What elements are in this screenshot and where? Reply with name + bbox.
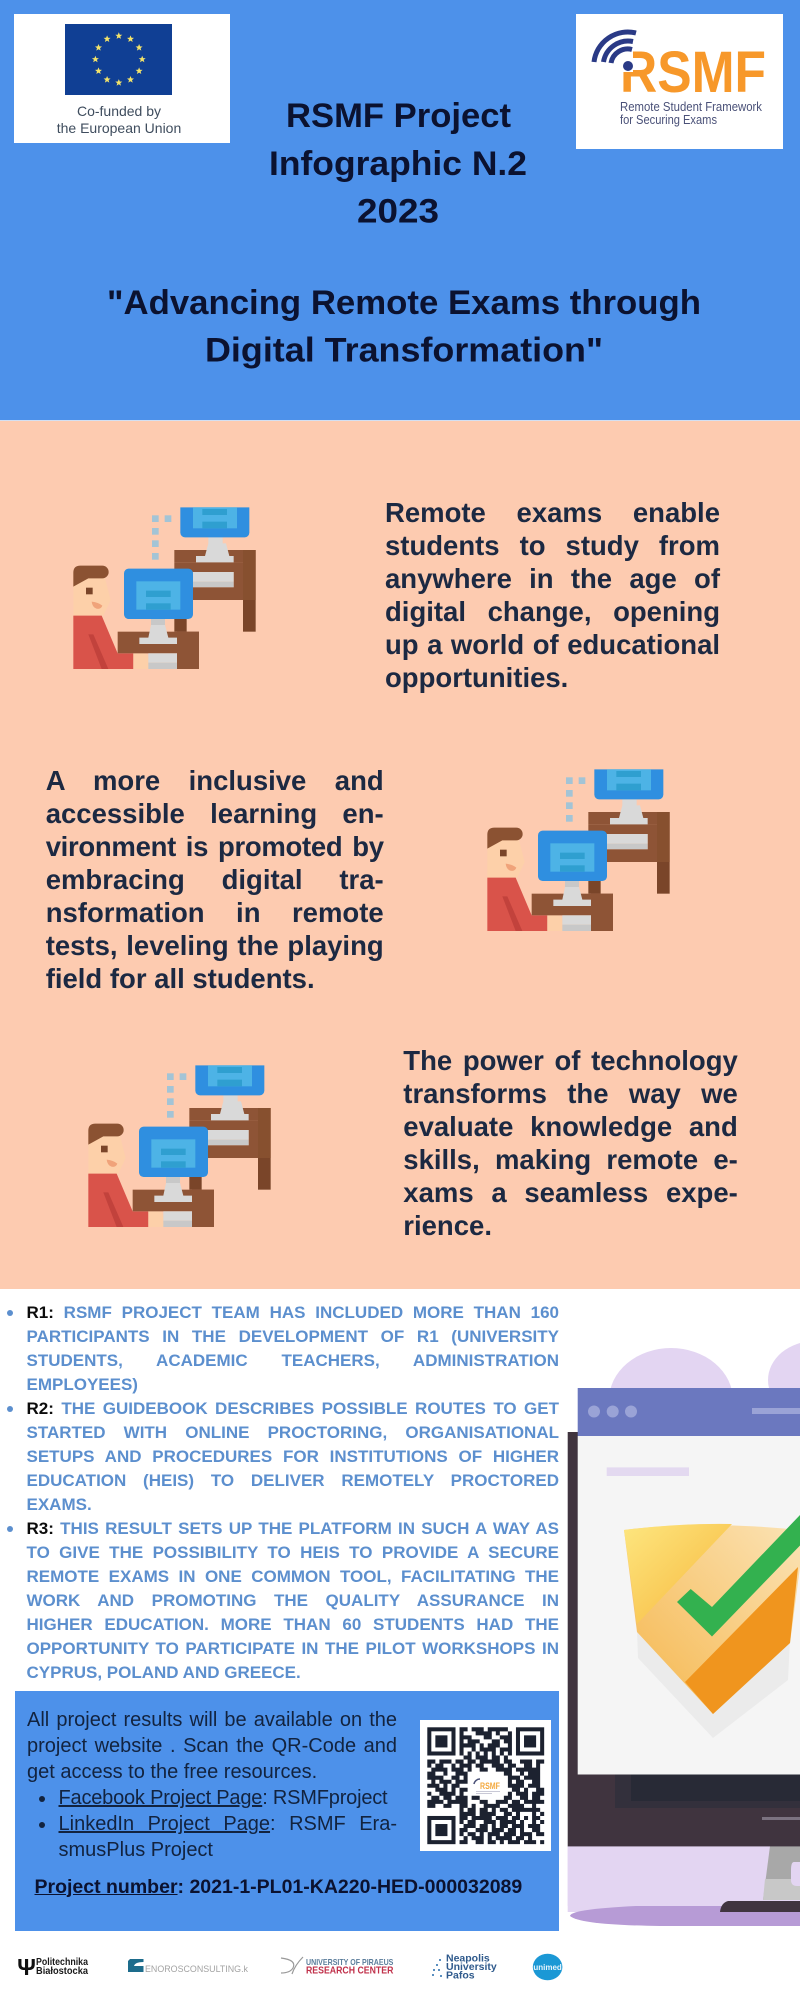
logo: Neapolis University Pafos: Pafos xyxy=(446,1969,475,1981)
results list: WORK AND PROMOTING THE QUALITY ASSURANCE IN xyxy=(26,1591,559,1610)
text block: project website and links: project website . Scan the QR-Code and xyxy=(27,1735,397,1757)
panel: digital transformation benefits xyxy=(0,421,800,1289)
title: 2023 xyxy=(357,192,439,230)
results list: EXAMS. xyxy=(26,1495,92,1514)
results list xyxy=(26,1303,559,1682)
logo: University of Piraeus Research Center: RESEARCH CENTER xyxy=(306,1964,394,1976)
text block: remote exams enable: anywhere in the age of xyxy=(385,563,720,594)
panel: header xyxy=(0,0,800,421)
text block: inclusive learning: A more inclusive and xyxy=(46,765,384,796)
results list: HIGHER EDUCATION. MORE THAN 60 STUDENTS HAD THE xyxy=(26,1615,559,1634)
illustration: secure exam monitor xyxy=(568,1343,800,1926)
text block: project website and links: LinkedIn Project Page: RSMF Era- xyxy=(58,1813,397,1835)
logo: Politechnika Bialostocka: Białostocka xyxy=(36,1966,88,1977)
logo: University of Piraeus Research Center xyxy=(281,1957,394,1976)
text block: power of technology xyxy=(403,1045,738,1241)
logo: Politechnika Bialostocka xyxy=(17,1954,88,1980)
results list: R2: THE GUIDEBOOK DESCRIBES POSSIBLE ROUTES TO GET xyxy=(26,1399,559,1418)
logo: Unimed xyxy=(533,1954,562,1980)
text block: remote exams enable: Remote exams enable xyxy=(385,497,720,528)
QR code: RSMF xyxy=(480,1781,500,1791)
text block: project website and links: All project results will be available on the xyxy=(27,1709,397,1731)
text block: project website and links: smusPlus Project xyxy=(58,1839,213,1861)
logo: University of Piraeus Research Center: UNIVERSITY OF PIRAEUS xyxy=(306,1957,394,1967)
text block: remote exams enable xyxy=(385,497,720,693)
text block: power of technology: rience. xyxy=(403,1210,492,1241)
bullet: R1 xyxy=(7,1310,13,1316)
results list: OPPORTUNITY TO PARTICIPATE IN THE PILOT WORKSHOPS IN xyxy=(26,1639,559,1658)
logo: Neapolis University Pafos: University xyxy=(446,1961,497,1973)
bullet: R3 xyxy=(7,1526,13,1532)
text block: remote exams enable: digital change, opening xyxy=(385,596,720,627)
results list: STUDENTS, ACADEMIC TEACHERS, ADMINISTRATION xyxy=(26,1351,559,1370)
text block: inclusive learning xyxy=(46,765,384,994)
logo: RSMF: Remote Student Framework xyxy=(620,99,762,114)
logo: EU co-funded: Co-funded by xyxy=(77,103,161,119)
results list: SETUPS AND PROCEDURES FOR INSTITUTIONS OF HIGHER xyxy=(26,1447,559,1466)
icon: student at computer 2 xyxy=(487,769,670,931)
logo: RSMF: RSMF xyxy=(620,40,766,105)
project number: Project number: 2021-1-PL01-KA220-HED-000032089 xyxy=(34,1876,522,1898)
bullet: Facebook xyxy=(39,1796,45,1802)
icon: student at computer 3 xyxy=(88,1065,271,1227)
bullet: LinkedIn xyxy=(39,1822,45,1828)
text block: remote exams enable: up a world of educational xyxy=(385,629,720,660)
icon: student at computer 1 xyxy=(73,507,256,669)
QR code xyxy=(420,1720,551,1851)
text block: power of technology: xams a seamless expe- xyxy=(403,1177,738,1208)
text block: remote exams enable: opportunities. xyxy=(385,662,568,693)
panel: project links box xyxy=(15,1691,559,1931)
results list: EMPLOYEES) xyxy=(26,1375,138,1394)
results list: R3: THIS RESULT SETS UP THE PLATFORM IN SUCH A WAY AS xyxy=(26,1519,559,1538)
text block: project website and links: get access to the free resources. xyxy=(27,1761,317,1783)
text block: inclusive learning: field for all students. xyxy=(46,963,315,994)
text block: inclusive learning: tests, leveling the playing xyxy=(46,930,384,961)
text block: remote exams enable: students to study from xyxy=(385,530,720,561)
text block: project website and links xyxy=(27,1709,397,1861)
title: "Advancing Remote Exams through xyxy=(107,284,701,322)
logo: Politechnika Bialostocka: Ψ xyxy=(17,1954,36,1980)
logo: Neapolis University Pafos xyxy=(432,1953,497,1981)
text block: power of technology: The power of technology xyxy=(403,1045,738,1076)
logo: EU co-funded: the European Union xyxy=(57,120,181,136)
text block: project website and links: Facebook Project Page: RSMFproject xyxy=(58,1787,387,1809)
logo: Neapolis University Pafos: Neapolis xyxy=(446,1953,490,1965)
text block: power of technology: transforms the way we xyxy=(403,1078,738,1109)
title: RSMF Project xyxy=(286,97,511,135)
title: Infographic N.2 xyxy=(269,145,527,183)
logo: RSMF xyxy=(576,14,783,149)
title: Digital Transformation" xyxy=(205,332,603,370)
logo: Politechnika Bialostocka: Politechnika xyxy=(36,1957,88,1968)
partner logos xyxy=(17,1953,562,1981)
results list: EDUCATION (HEIS) TO DELIVER REMOTELY PROCTORED xyxy=(26,1471,559,1490)
results list: TO GIVE THE POSSIBILITY TO HEIS TO PROVIDE A SECURE xyxy=(26,1543,559,1562)
results list: CYPRUS, POLAND AND GREECE. xyxy=(26,1663,301,1682)
text block: inclusive learning: vironment is promoted by xyxy=(46,831,384,862)
text block: inclusive learning: nsformation in remote xyxy=(46,897,384,928)
logo: EU co-funded xyxy=(14,14,230,143)
panel: results and contacts xyxy=(0,1289,800,2000)
logo: Enoros Consulting: ENOROSCONSULTING.k xyxy=(145,1964,248,1974)
logo: Unimed: unimed xyxy=(533,1963,562,1972)
results list: STARTED WITH ONLINE PROCTORING, ORGANISATIONAL xyxy=(26,1423,559,1442)
logo: RSMF: for Securing Exams xyxy=(620,112,717,127)
text block: inclusive learning: accessible learning en- xyxy=(46,798,384,829)
title xyxy=(107,97,701,370)
logo: Enoros Consulting xyxy=(128,1959,248,1974)
results list: REMOTE EXAMS IN ONE COMMON TOOL, FACILITATING THE xyxy=(26,1567,559,1586)
text block: inclusive learning: embracing digital tra- xyxy=(46,864,384,895)
results list: PARTICIPANTS IN THE DEVELOPMENT OF R1 (UNIVERSITY xyxy=(26,1327,559,1346)
text block: power of technology: skills, making remote e- xyxy=(403,1144,738,1175)
results list: R1: RSMF PROJECT TEAM HAS INCLUDED MORE THAN 160 xyxy=(26,1303,559,1322)
text block: power of technology: evaluate knowledge and xyxy=(403,1111,738,1142)
bullet: R2 xyxy=(7,1406,13,1412)
